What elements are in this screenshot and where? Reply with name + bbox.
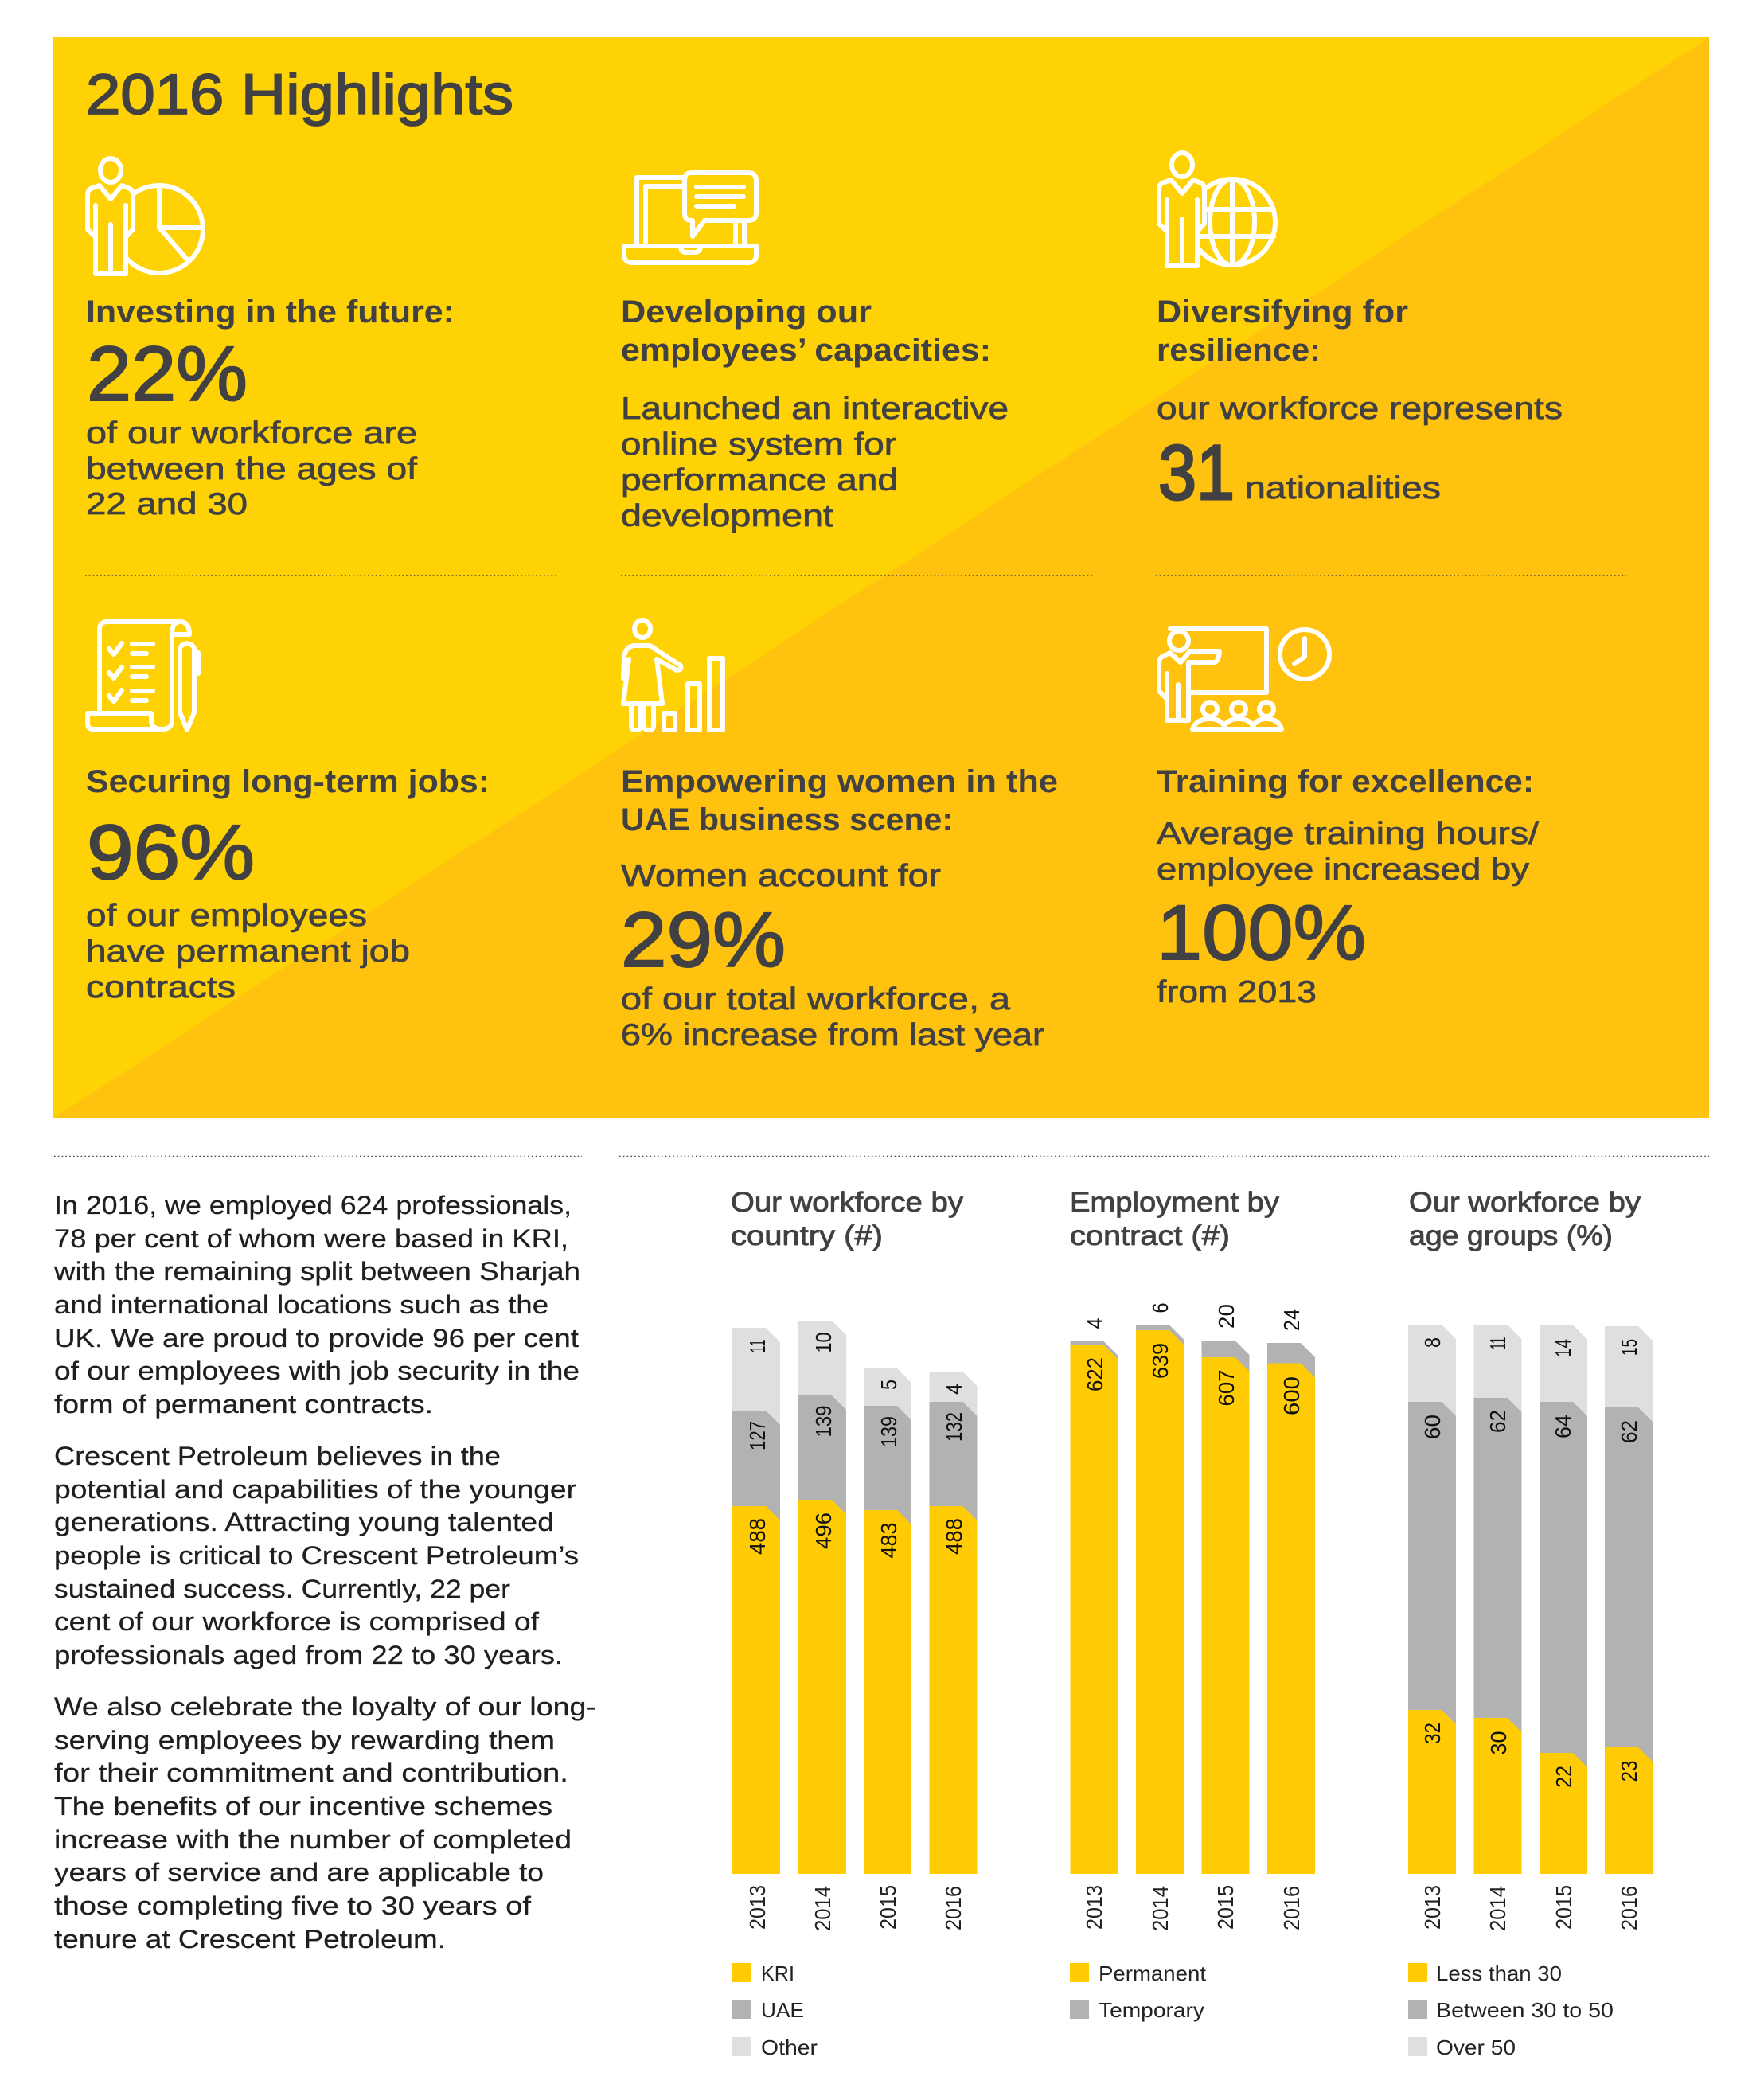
heading: Training for excellence: (1157, 764, 1534, 799)
bar 2015: 5 (876, 1380, 901, 1390)
legend (1408, 1961, 1614, 2059)
legend (1070, 1961, 1207, 2022)
description: from 2013 (1157, 975, 1317, 1009)
unit: nationalities: nationalities (1245, 471, 1441, 505)
paragraph 1: 78 per cent of whom were based in KRI, (54, 1224, 568, 1253)
icon: presenter with board, clock and audience (1159, 629, 1329, 729)
description: Launched an interactive (621, 392, 1009, 426)
icon: woman with rising bars (623, 620, 723, 730)
lead-in (1157, 817, 1539, 887)
bar 2014: 639 (1148, 1343, 1173, 1379)
highlight: diversifying for resilience (1157, 153, 1563, 516)
lead-in: Women account for (621, 859, 941, 893)
description: online system for (621, 427, 896, 462)
bar 2016 (1267, 1309, 1315, 1930)
bar 2013 (1070, 1318, 1118, 1930)
heading: resilience: (1157, 333, 1321, 368)
bar 2016: 62 (1617, 1420, 1641, 1443)
bar 2016: 2016 (1279, 1886, 1304, 1930)
heading (1157, 295, 1408, 368)
bar 2013: 8 (1420, 1337, 1445, 1348)
bar 2015: 20 (1214, 1304, 1239, 1329)
bar 2015 (864, 1368, 911, 1930)
bar 2013: 2013 (1082, 1885, 1106, 1930)
bar 2015: 14 (1551, 1339, 1575, 1357)
heading: Securing long-term jobs: (86, 764, 490, 799)
description: of our employees (86, 899, 367, 933)
highlight: investing in the future (86, 158, 455, 521)
description: development (621, 499, 833, 533)
legend: Between 30 to 50 (1436, 1998, 1614, 2022)
chart: workforce by age groups (1408, 1187, 1653, 2059)
chart title: age groups (%) (1409, 1220, 1613, 1251)
chart title (731, 1187, 964, 1251)
bar 2013 (1408, 1325, 1456, 1930)
panel: 2016 highlights (53, 37, 1709, 1118)
bar 2016: 2016 (1617, 1886, 1641, 1930)
bar 2015 (1540, 1325, 1587, 1930)
chart title: contract (#) (1070, 1220, 1230, 1251)
paragraph 3: for their commitment and contribution. (54, 1758, 568, 1787)
legend: UAE (761, 1998, 804, 2022)
big number: 100%: 100% (1157, 889, 1366, 976)
paragraph 2: people is critical to Crescent Petroleum’s (54, 1541, 579, 1570)
description: of our workforce are (86, 416, 417, 451)
bar 2014: 10 (811, 1333, 836, 1353)
bar 2015: 2015 (876, 1885, 900, 1930)
paragraph 3: those completing five to 30 years of (54, 1891, 531, 1920)
paragraph 1: with the remaining split between Sharjah (53, 1257, 580, 1286)
legend: Less than 30 (1436, 1961, 1562, 1985)
chart title: Employment by (1070, 1187, 1280, 1218)
bar 2013: 488 (745, 1518, 770, 1555)
legend: Over 50 (1436, 2036, 1516, 2059)
description: performance and (621, 463, 898, 498)
paragraph 1: and international locations such as the (54, 1290, 548, 1319)
legend: Permanent (1099, 1961, 1207, 1985)
bar 2016: 132 (942, 1412, 966, 1442)
icon: laptop with speech bubble (624, 173, 756, 263)
highlight: securing long-term jobs (86, 622, 490, 1005)
bar 2013: 2013 (745, 1885, 770, 1930)
paragraph 3: tenure at Crescent Petroleum. (54, 1925, 446, 1954)
bar 2014: 2014 (1485, 1886, 1510, 1931)
description (621, 982, 1044, 1052)
heading: employees’ capacities: (621, 333, 991, 368)
paragraph 2 (54, 1442, 579, 1669)
chart title (1409, 1187, 1641, 1251)
big number: 29%: 29% (621, 896, 786, 983)
paragraph 2: Crescent Petroleum believes in the (54, 1442, 501, 1470)
description: of our total workforce, a (621, 982, 1010, 1017)
lead-in: employee increased by (1157, 853, 1530, 887)
paragraph 3: We also celebrate the loyalty of our long- (54, 1692, 596, 1721)
bar 2014: 62 (1485, 1410, 1510, 1433)
chart title: Our workforce by (731, 1187, 964, 1218)
icon: checklist and pen (88, 622, 198, 730)
bar 2013: 60 (1420, 1415, 1445, 1439)
paragraph 1: In 2016, we employed 624 professionals, (54, 1191, 572, 1220)
icon: person with pie chart (88, 158, 203, 274)
bar 2014: 496 (811, 1512, 836, 1549)
bar 2014: 6 (1148, 1302, 1173, 1313)
lead-in: Average training hours/ (1157, 817, 1539, 851)
description (621, 392, 1009, 533)
paragraph 2: sustained success. Currently, 22 per (54, 1575, 510, 1603)
text block: workforce narrative (53, 1191, 596, 1954)
legend: Other (761, 2036, 818, 2059)
description: between the ages of (86, 452, 417, 486)
bar 2016: 24 (1279, 1309, 1304, 1331)
bar 2015: 64 (1551, 1415, 1575, 1438)
chart title: country (#) (731, 1220, 883, 1251)
bar 2016 (1605, 1326, 1653, 1930)
bar 2016: 2016 (941, 1886, 966, 1930)
bar 2016: 488 (942, 1518, 966, 1555)
highlight: training for excellence (1157, 629, 1539, 1009)
description: 22 and 30 (86, 487, 248, 521)
bar 2015: 2015 (1213, 1885, 1238, 1930)
heading: Diversifying for (1157, 295, 1408, 330)
heading: Empowering women in the (621, 764, 1058, 799)
bar 2016: 600 (1279, 1376, 1304, 1415)
paragraph 3: The benefits of our incentive schemes (54, 1792, 552, 1821)
bar 2015 (1202, 1304, 1250, 1930)
bar 2014: 139 (811, 1406, 836, 1438)
bar 2014 (1136, 1302, 1184, 1931)
paragraph 2: potential and capabilities of the younger (54, 1475, 576, 1504)
bar 2016 (930, 1372, 978, 1930)
chart: employment by contract (1070, 1187, 1315, 2022)
paragraph 1: of our employees with job security in the (54, 1356, 580, 1385)
bar 2013: 127 (745, 1421, 770, 1450)
big number: 22%: 22% (87, 330, 248, 417)
heading: UAE business scene: (621, 802, 953, 837)
description (86, 416, 417, 521)
chart: workforce by country (731, 1187, 978, 2059)
icon: person with globe (1159, 153, 1275, 266)
heading: Developing our (621, 295, 872, 330)
paragraph 1: UK. We are proud to provide 96 per cent (54, 1324, 579, 1352)
bar 2015: 139 (876, 1416, 901, 1447)
legend: Temporary (1099, 1998, 1204, 2022)
paragraph 3 (54, 1692, 596, 1954)
paragraph 2: cent of our workforce is comprised of (54, 1607, 539, 1636)
bar 2014: 11 (1485, 1337, 1510, 1350)
paragraph 3: increase with the number of completed (54, 1825, 572, 1854)
bar 2013: 32 (1420, 1723, 1445, 1744)
highlight: empowering women (621, 620, 1058, 1052)
bar 2013: 4 (1083, 1318, 1107, 1329)
bar 2014: 2014 (810, 1886, 835, 1931)
bar 2015: 483 (876, 1522, 901, 1559)
heading (621, 764, 1058, 837)
bar 2013: 11 (745, 1339, 770, 1353)
description (86, 899, 410, 1005)
bar 2013 (732, 1328, 780, 1930)
title: 2016 Highlights (86, 64, 513, 127)
highlight: developing our employees' capacities (621, 173, 1009, 533)
big number: 96%: 96% (87, 809, 255, 896)
bar 2016: 23 (1617, 1761, 1641, 1782)
bar 2014 (1474, 1325, 1522, 1931)
heading (621, 295, 991, 368)
bar 2014: 2014 (1148, 1886, 1173, 1931)
bar 2014: 30 (1486, 1731, 1511, 1754)
legend: KRI (761, 1961, 794, 1985)
paragraph 1: form of permanent contracts. (54, 1390, 433, 1419)
paragraph 1 (53, 1191, 580, 1419)
bar 2015: 2015 (1551, 1885, 1576, 1930)
paragraph 3: years of service and are applicable to (54, 1858, 544, 1887)
bar 2014 (798, 1321, 846, 1931)
bar 2016: 15 (1617, 1339, 1641, 1356)
bar 2013: 622 (1083, 1357, 1107, 1391)
panel background (53, 37, 1709, 1118)
big number: 31: 31 (1158, 429, 1235, 516)
bar 2015: 22 (1551, 1766, 1576, 1788)
description: have permanent job (86, 935, 410, 969)
chart title: Our workforce by (1409, 1187, 1641, 1218)
description: 6% increase from last year (621, 1018, 1044, 1052)
bar 2016: 4 (942, 1384, 966, 1395)
paragraph 2: professionals aged from 22 to 30 years. (54, 1641, 563, 1669)
paragraph 3: serving employees by rewarding them (54, 1726, 555, 1754)
description: contracts (86, 970, 236, 1005)
bar 2013: 2013 (1420, 1885, 1445, 1930)
description: our workforce represents (1157, 392, 1563, 426)
paragraph 2: generations. Attracting young talented (54, 1508, 554, 1536)
chart title (1070, 1187, 1280, 1251)
heading: Investing in the future: (86, 295, 455, 330)
legend (732, 1961, 818, 2059)
bar 2015: 607 (1214, 1369, 1239, 1406)
